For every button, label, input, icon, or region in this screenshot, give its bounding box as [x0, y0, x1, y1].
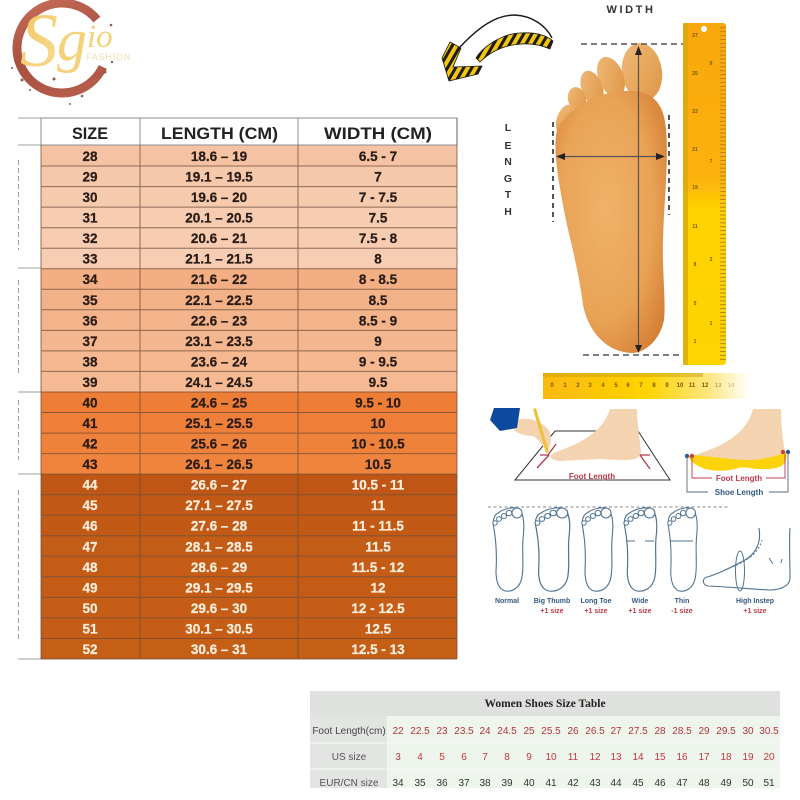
- row size 44: 26.6 – 27: [191, 478, 247, 493]
- vertical ruler: 19: [692, 185, 698, 191]
- row size 28: 6.5 - 7: [359, 149, 397, 164]
- yellow shoe sole: [688, 452, 786, 471]
- eur and cn size row: 50: [742, 778, 754, 789]
- row size 47: [41, 536, 457, 556]
- table header: WIDTH (CM): [324, 124, 432, 143]
- row size 50: [41, 597, 457, 618]
- row size 30: 30: [82, 190, 98, 205]
- foot type diagrams: [488, 507, 790, 615]
- row size 49: 12: [370, 580, 386, 595]
- row size 28: [41, 146, 457, 166]
- foot length row: 27.5: [628, 726, 648, 737]
- eur and cn size row: 46: [654, 778, 666, 789]
- row size 42: 10 - 10.5: [351, 437, 405, 452]
- row size 38: 9 - 9.5: [359, 354, 398, 369]
- foot length row: 26.5: [585, 726, 605, 737]
- row size 52: 52: [82, 642, 98, 657]
- us size row: US size: [332, 752, 367, 763]
- row size 49: 49: [82, 580, 98, 595]
- row size 31: 20.1 – 20.5: [185, 211, 253, 226]
- eur and cn size row: 34: [392, 778, 404, 789]
- row size 42: 42: [82, 437, 98, 452]
- row size 46: 46: [82, 519, 98, 534]
- eur and cn size row: 40: [523, 778, 535, 789]
- foot length row: 26: [567, 726, 579, 737]
- foot length versus shoe length: [685, 409, 790, 497]
- bracket lines: [692, 454, 785, 478]
- eur and cn size row: 49: [720, 778, 732, 789]
- arrow hatched edge: [442, 33, 553, 81]
- eur and cn size row: 51: [763, 778, 775, 789]
- caption: foot length: Foot Length: [569, 472, 615, 481]
- logo script g: g: [57, 7, 87, 73]
- eur and cn size row: 35: [414, 778, 426, 789]
- vertical ruler: 23: [692, 109, 698, 115]
- foot type: wide: Wide: [632, 598, 648, 605]
- horizontal ruler: 9: [665, 383, 669, 389]
- foot length row: 24: [479, 726, 491, 737]
- row size 46: [41, 515, 457, 536]
- row size 35: 22.1 – 22.5: [185, 293, 253, 308]
- foot type: normal: [493, 508, 524, 605]
- row size 38: 38: [82, 354, 98, 369]
- horizontal ruler: 5: [614, 383, 618, 389]
- row size 40: [41, 392, 457, 412]
- horizontal ruler: 6: [626, 383, 630, 389]
- row size 33: 8: [374, 252, 382, 267]
- row size 32: 32: [82, 231, 98, 246]
- row size 34: 21.6 – 22: [191, 272, 247, 287]
- eur and cn size row: 48: [698, 778, 710, 789]
- label: width: WIDTH: [606, 4, 656, 16]
- table header: [41, 118, 457, 145]
- foot type: wide: +1 size: [628, 608, 652, 615]
- foot type: long toe: [581, 508, 613, 615]
- row size 50: 12 - 12.5: [351, 601, 405, 616]
- eur and cn size row: 45: [632, 778, 644, 789]
- foot length row: 30: [742, 726, 754, 737]
- row size 51: 12.5: [365, 621, 392, 636]
- us size row: 11: [568, 752, 579, 763]
- arrow thin outline: [460, 15, 552, 47]
- paper outline: [515, 431, 670, 480]
- foot length row: 29.5: [716, 726, 736, 737]
- row size 44: 10.5 - 11: [352, 478, 405, 493]
- vertical ruler: 8: [694, 262, 697, 268]
- row size 34: 8 - 8.5: [359, 272, 398, 287]
- foot type: long toe: Long Toe: [581, 598, 612, 605]
- row size 29: 19.1 – 19.5: [185, 170, 253, 184]
- row size 39: 24.1 – 24.5: [185, 375, 253, 390]
- row size 39: 39: [82, 375, 98, 390]
- horizontal ruler: 0: [550, 383, 554, 389]
- row size 29: [41, 166, 457, 187]
- row size 33: [41, 248, 457, 269]
- foot length row: Foot Length(cm): [312, 726, 386, 737]
- vertical ruler: 11: [692, 224, 698, 230]
- row size 42: [41, 433, 457, 454]
- row size 37: 23.1 – 23.5: [185, 334, 253, 349]
- row size 36: 8.5 - 9: [359, 313, 397, 328]
- eur and cn size row: 36: [436, 778, 448, 789]
- row size 34: [41, 269, 457, 289]
- horizontal ruler: 4: [601, 383, 605, 389]
- us size row: 5: [439, 752, 445, 763]
- vertical ruler: 27: [692, 33, 698, 39]
- foot length row: 29: [698, 726, 710, 737]
- us size row: 10: [545, 752, 557, 763]
- foot length row: 23: [436, 726, 448, 737]
- row size 43: 26.1 – 26.5: [185, 457, 253, 472]
- women shoes size table: [310, 691, 780, 789]
- foot length row: 25: [523, 726, 535, 737]
- row size 38: 23.6 – 24: [191, 354, 248, 369]
- row size 38: [41, 351, 457, 371]
- row size 42: 25.6 – 26: [191, 437, 248, 452]
- row size 30: 19.6 – 20: [191, 190, 247, 205]
- row size 51: 51: [82, 621, 98, 636]
- us size row: [332, 752, 775, 763]
- row size 37: [41, 330, 457, 351]
- row size 36: 36: [82, 313, 98, 328]
- foot length row: 22.5: [410, 726, 430, 737]
- row size 45: 11: [371, 498, 386, 513]
- row size 39: 9.5: [369, 375, 388, 390]
- hand and pencil: [490, 408, 551, 453]
- us size row: 15: [654, 752, 666, 763]
- label: length: N: [504, 156, 512, 168]
- us size row: 13: [610, 752, 622, 763]
- foot type: long toe: +1 size: [584, 608, 608, 615]
- row size 35: [41, 289, 457, 310]
- table header: LENGTH (CM): [161, 124, 278, 143]
- row size 32: 20.6 – 21: [191, 231, 248, 246]
- size chart table: [41, 118, 457, 659]
- us size row: 17: [698, 752, 710, 763]
- foot length row: 23.5: [454, 726, 474, 737]
- foot length row: 28.5: [672, 726, 692, 737]
- row size 52: 30.6 – 31: [191, 642, 248, 657]
- vertical ruler: 7: [710, 159, 713, 165]
- us size row: 6: [461, 752, 467, 763]
- foot length row: [312, 726, 779, 737]
- logo paint splatter: [11, 24, 113, 105]
- logo script S: S: [20, 0, 58, 83]
- vertical ruler: 25: [692, 71, 698, 77]
- row size 41: [41, 412, 457, 433]
- horizontal ruler: 12: [702, 383, 709, 389]
- vertical ruler: 1: [710, 321, 713, 327]
- eur and cn size row: 38: [479, 778, 491, 789]
- row size 37: 9: [374, 334, 382, 349]
- horizontal ruler: [543, 373, 750, 399]
- row size 52: 12.5 - 13: [351, 642, 405, 657]
- row size 43: 43: [82, 457, 98, 472]
- eur and cn size row: 42: [567, 778, 579, 789]
- foot length row: 30.5: [759, 726, 779, 737]
- vertical ruler: 5: [694, 301, 697, 307]
- row size 50: 50: [82, 601, 98, 616]
- horizontal ruler: 3: [588, 383, 592, 389]
- row size 40: 24.6 – 25: [191, 396, 248, 410]
- how to measure foot length: [490, 408, 670, 481]
- row size 48: 28.6 – 29: [191, 560, 247, 575]
- eur and cn size row: [320, 778, 775, 789]
- row size 51: [41, 618, 457, 638]
- foot measuring diagram: [504, 4, 750, 399]
- vertical ruler: [683, 23, 726, 365]
- logo script io: io: [87, 19, 113, 55]
- us size row: 12: [589, 752, 601, 763]
- row size 48: 48: [82, 560, 98, 575]
- us size row: 9: [526, 752, 532, 763]
- foot type: high instep: High Instep: [736, 598, 774, 605]
- row size 29: 7: [374, 170, 382, 184]
- curved arrow pointing left: [442, 15, 553, 81]
- row size 52: [41, 638, 457, 659]
- row size 47: 47: [82, 539, 98, 554]
- horizontal ruler: 11: [689, 383, 696, 389]
- horizontal ruler: 2: [576, 383, 580, 389]
- eur and cn size row: 39: [501, 778, 513, 789]
- eur and cn size row: 47: [676, 778, 688, 789]
- row size 31: [41, 207, 457, 228]
- horizontal ruler: 10: [677, 383, 684, 389]
- row size 49: 29.1 – 29.5: [185, 580, 253, 595]
- us size row: 20: [763, 752, 775, 763]
- red measuring marks: [537, 444, 650, 469]
- foot type: thin: Thin: [675, 598, 689, 605]
- vertical ruler: 21: [692, 147, 698, 153]
- foot type: wide: [624, 508, 657, 615]
- horizontal ruler: 7: [639, 383, 643, 389]
- row size 31: 7.5: [369, 211, 388, 226]
- foot length row: 24.5: [497, 726, 517, 737]
- row size 45: [41, 495, 457, 515]
- row size 35: 35: [82, 293, 98, 308]
- row size 40: 40: [82, 396, 98, 410]
- logo tagline: FASHION: [86, 52, 131, 62]
- us size row: 16: [676, 752, 688, 763]
- vertical ruler: 3: [710, 257, 713, 263]
- eur and cn size row: 44: [610, 778, 622, 789]
- row size 33: 33: [82, 252, 98, 267]
- row size 47: 11.5: [365, 539, 391, 554]
- foot in shoe: [692, 409, 785, 460]
- table header: SIZE: [72, 124, 108, 143]
- caption: foot length: Foot Length: [716, 474, 762, 483]
- foot type: big thumb: +1 size: [540, 608, 564, 615]
- row size 29: 29: [82, 170, 98, 184]
- label: length: T: [505, 189, 512, 201]
- eur and cn size row: 37: [458, 778, 470, 789]
- us size row: 8: [504, 752, 510, 763]
- row size 44: 44: [82, 478, 98, 493]
- row size 44: [41, 474, 457, 495]
- us size row: 7: [482, 752, 488, 763]
- label: length: H: [504, 206, 512, 218]
- row size 33: 21.1 – 21.5: [185, 252, 253, 267]
- table title: Women Shoes Size Table: [484, 698, 606, 710]
- us size row: 19: [742, 752, 754, 763]
- row size 41: 10: [370, 416, 386, 431]
- foot on paper: [551, 409, 641, 461]
- foot length row: 25.5: [541, 726, 561, 737]
- measuring guides: [553, 44, 683, 355]
- foot type: thin: -1 size: [671, 608, 693, 615]
- row size 45: 45: [82, 498, 98, 513]
- side remnant lines: [18, 118, 41, 659]
- eur and cn size row: EUR/CN size: [320, 778, 379, 789]
- row size 43: [41, 454, 457, 474]
- us size row: 14: [632, 752, 644, 763]
- row size 43: 10.5: [365, 457, 392, 472]
- row size 30: 7 - 7.5: [359, 190, 398, 205]
- vertical ruler: 1: [694, 339, 697, 345]
- label: length: G: [504, 173, 512, 185]
- logo: Sgio Fashion: [2, 0, 131, 108]
- foot sole illustration: [552, 40, 667, 353]
- eur and cn size row: 41: [545, 778, 557, 789]
- row size 50: 29.6 – 30: [191, 601, 247, 616]
- foot length row: 22: [392, 726, 404, 737]
- length dots: [685, 450, 790, 458]
- foot type: high instep: [703, 528, 790, 615]
- vertical ruler: 9: [710, 61, 713, 67]
- eur and cn size row: 43: [589, 778, 601, 789]
- foot type: thin: [668, 508, 697, 615]
- row size 28: 28: [82, 149, 98, 164]
- row size 28: 18.6 – 19: [191, 149, 247, 164]
- row size 36: [41, 310, 457, 330]
- label: length: L: [505, 122, 512, 134]
- horizontal ruler: 1: [563, 383, 567, 389]
- foot type: high instep: +1 size: [743, 608, 767, 615]
- row size 31: 31: [82, 211, 98, 226]
- foot type: normal: Normal: [495, 598, 519, 605]
- row size 40: 9.5 - 10: [355, 396, 401, 410]
- row size 45: 27.1 – 27.5: [185, 498, 253, 513]
- us size row: 18: [720, 752, 732, 763]
- row size 41: 41: [82, 416, 98, 431]
- row size 36: 22.6 – 23: [191, 313, 248, 328]
- foot type: big thumb: [534, 508, 570, 615]
- row size 35: 8.5: [369, 293, 388, 308]
- horizontal ruler: 14: [728, 383, 735, 389]
- row size 34: 34: [82, 272, 98, 287]
- foot type: big thumb: Big Thumb: [534, 598, 570, 605]
- row size 51: 30.1 – 30.5: [185, 621, 253, 636]
- row size 48: 11.5 - 12: [352, 560, 404, 575]
- caption: shoe length: Shoe Length: [715, 488, 763, 497]
- label: length: E: [504, 140, 512, 152]
- row size 49: [41, 577, 457, 597]
- us size row: 4: [417, 752, 423, 763]
- row size 32: [41, 228, 457, 248]
- row size 39: [41, 371, 457, 392]
- foot length row: 28: [654, 726, 666, 737]
- table backgrounds: [310, 691, 780, 788]
- row size 46: 27.6 – 28: [191, 519, 248, 534]
- row size 48: [41, 556, 457, 577]
- row size 46: 11 - 11.5: [352, 519, 404, 534]
- row size 47: 28.1 – 28.5: [185, 539, 253, 554]
- label: length: [504, 122, 512, 218]
- row size 41: 25.1 – 25.5: [185, 416, 253, 431]
- us size row: 3: [395, 752, 401, 763]
- row size 32: 7.5 - 8: [359, 231, 398, 246]
- horizontal ruler: 8: [652, 383, 656, 389]
- row size 30: [41, 187, 457, 207]
- row size 37: 37: [82, 334, 98, 349]
- foot length row: 27: [610, 726, 622, 737]
- logo brush ring: [2, 0, 122, 108]
- horizontal ruler: 13: [715, 383, 722, 389]
